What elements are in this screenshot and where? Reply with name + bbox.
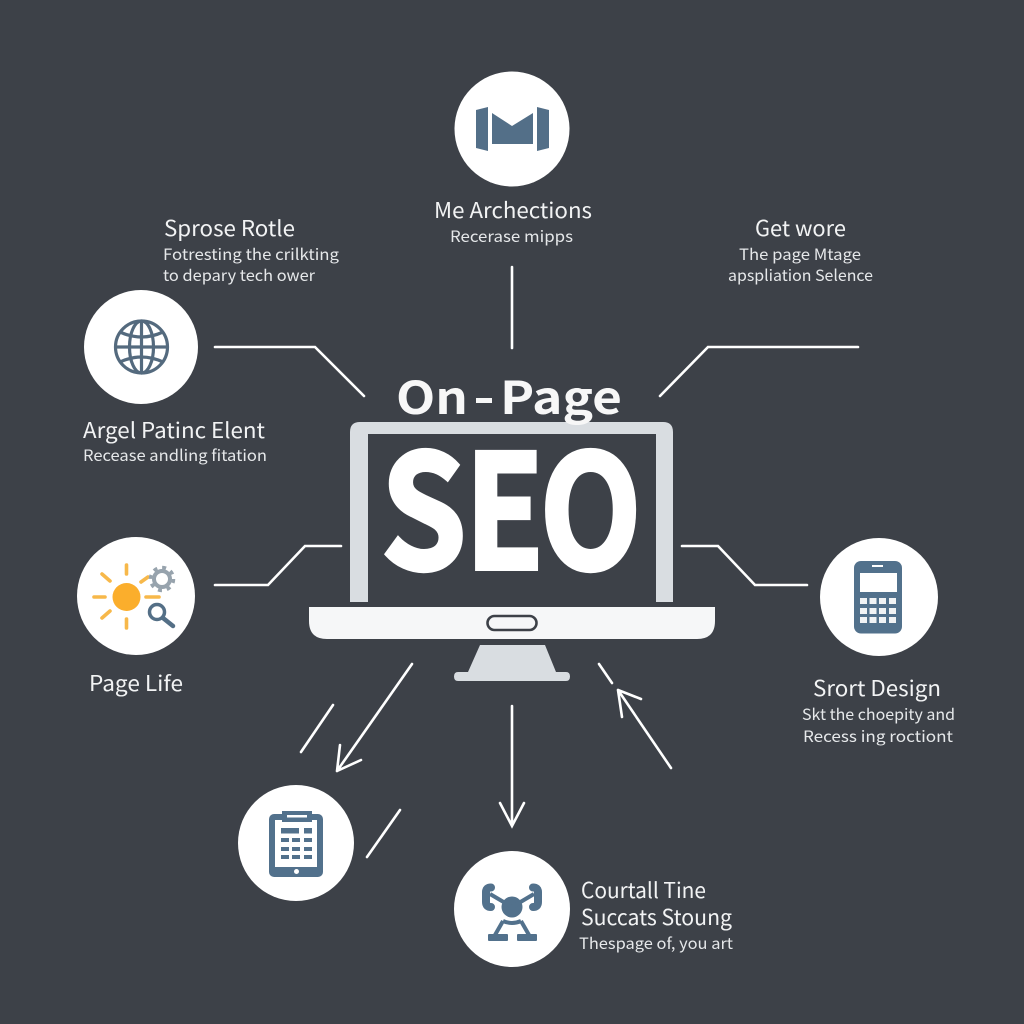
description line 1: The page Mtage [739,243,861,265]
description line 2: Recess ing roctiont [803,725,953,747]
icon: open book mail [476,107,549,151]
description line 2: to depary tech ower [163,264,316,286]
SEO heading: E [465,386,544,615]
icon: clipboard tablet [269,811,323,877]
node: phone [820,538,938,656]
icon: phone [854,561,902,634]
heading: Argel Patinc Elent [83,414,265,445]
text block: globe [83,414,267,466]
text block: upper left [163,212,339,286]
heading: Me Archections [434,194,592,225]
heading: Sprose Rotle [164,212,295,243]
node: top [454,72,570,186]
icon: magnifier [150,604,173,626]
circle [238,785,354,901]
icon: sun [94,565,159,628]
arrow: to bottom [500,706,524,826]
main title: Page [500,362,622,427]
icon: network [486,888,538,941]
icon: gear [150,568,174,590]
description: Thespage of, you art [579,932,733,954]
connector: upper left [215,347,364,396]
main title [396,362,622,427]
monitor stand [454,645,570,681]
description line 1: Skt the choepity and [802,703,955,725]
circle [84,290,198,404]
laptop illustration [309,386,715,681]
laptop button [488,616,536,630]
connector: upper right [660,347,858,396]
connector: top [511,267,513,348]
circle [77,537,195,655]
arrow: from lower right [618,690,671,768]
description: Recease andling fitation [83,444,267,466]
SEO heading: S [381,386,467,615]
text block: phone [802,672,955,747]
dash: short lower [367,810,400,857]
SEO heading [381,386,642,615]
heading line 1: Courtall Tine [581,874,706,905]
connector: middle right [682,546,807,585]
heading: Srort Design [813,672,941,703]
circle [454,72,570,186]
text block: network [579,874,733,954]
label: page life: Page Life [89,667,183,698]
dash: short upper [301,705,333,752]
text block: top [434,194,592,247]
dash: short right [599,664,612,683]
connector: middle left [215,546,341,585]
heading line 2: Succats Stoung [581,901,732,932]
circle [820,538,938,656]
node: globe [84,290,198,404]
node: clipboard [238,785,354,901]
description line 1: Fotresting the crilkting [163,243,339,265]
SEO heading: O [540,386,642,615]
node: network [454,851,570,967]
arrow: to lower left [337,664,412,771]
description: Recerase mipps [450,225,573,247]
node: sun [77,537,195,655]
text block: upper right [728,212,873,286]
circle [454,851,570,967]
icon: globe [116,321,168,373]
laptop base [309,607,715,639]
laptop screen frame [350,422,673,602]
heading: Get wore [755,212,846,243]
main title: On [396,362,468,427]
description line 2: apspliation Selence [728,264,873,286]
